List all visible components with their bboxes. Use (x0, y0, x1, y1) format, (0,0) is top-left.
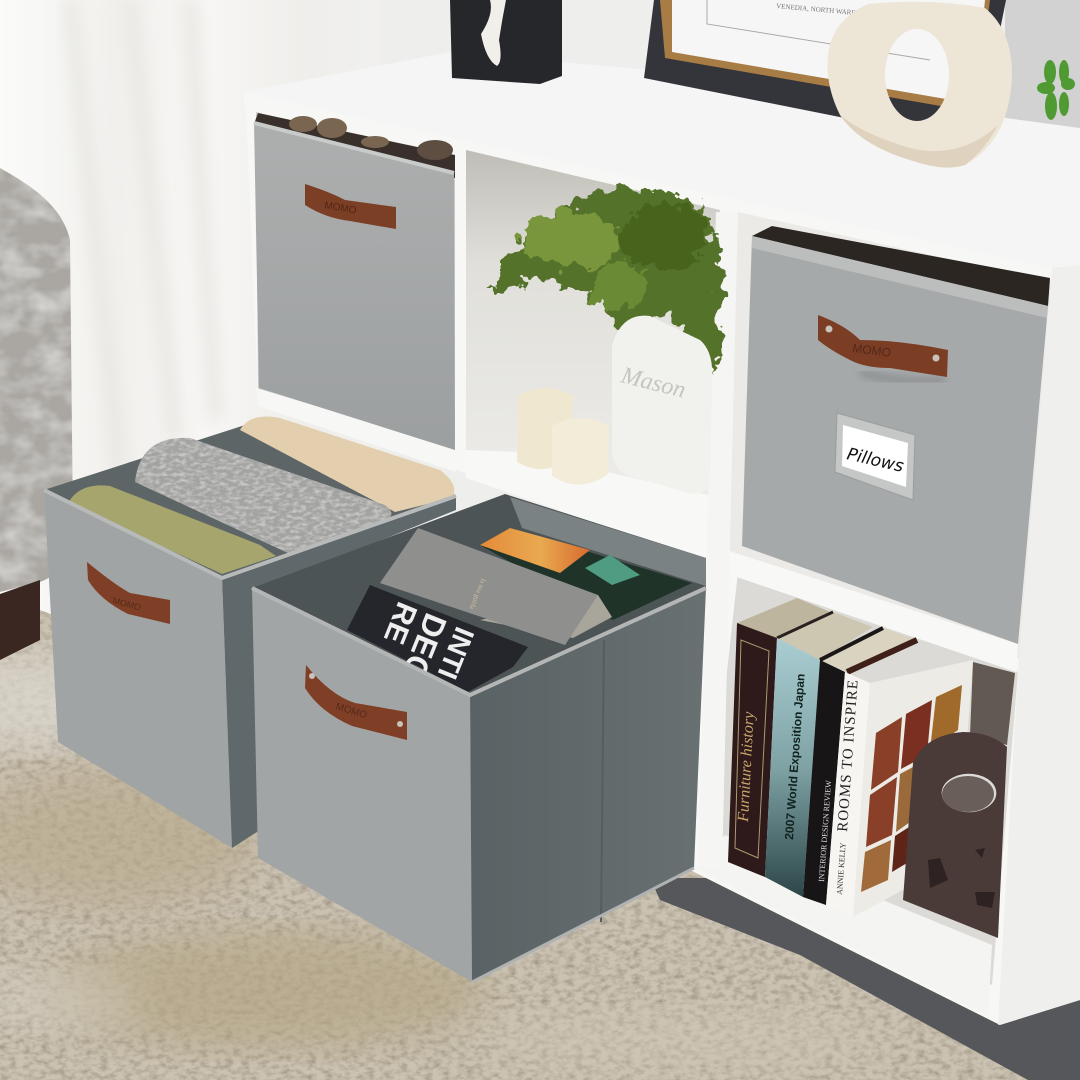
left open bin with towels: MOMO (111, 595, 142, 612)
white cube shelf unit (243, 52, 1080, 1025)
olive towel (68, 485, 276, 574)
book: world exposition: 2007 World Exposition Japan (782, 673, 808, 840)
cell: upper left interior (256, 112, 455, 460)
right bin with label (742, 236, 1048, 644)
front open bin with books: MOMO (334, 701, 368, 721)
right side panel (998, 265, 1080, 1025)
dark floor (650, 878, 1080, 1080)
book: interior design review: INTERIOR DESIGN REVIEW (817, 780, 833, 882)
picture frame: VENEDIA, NORTH WARDS MALL (776, 2, 882, 19)
book: rooms to inspire: ANNIE KELLY (835, 842, 848, 895)
leather handle (818, 315, 948, 377)
leather handle (305, 665, 407, 740)
book: furniture history (728, 598, 830, 877)
shaggy beige rug (0, 610, 1035, 1080)
dark wooden ornament (903, 732, 1007, 938)
lower right board (720, 548, 1018, 672)
dark gap above upper left bin (254, 113, 455, 178)
dark gap above right bin (752, 226, 1050, 306)
cover photo grid (861, 685, 962, 892)
decor on top of the shelf (450, 0, 1075, 168)
book: rooms to inspire (826, 660, 973, 917)
peach towel (240, 416, 454, 512)
books in lower right cell (728, 598, 1015, 938)
bin side face (470, 588, 706, 982)
book: interior design review (803, 628, 917, 905)
black tissue box (450, 0, 562, 84)
grey book: la tua guida (468, 577, 488, 611)
spine (826, 672, 870, 917)
left shelf board (256, 388, 456, 472)
book: furniture history: Furniture history (735, 711, 758, 823)
mason jar: Mason (618, 362, 688, 404)
shelf front body (243, 92, 1080, 1025)
cover (853, 660, 973, 917)
center vertical post (698, 212, 738, 870)
cream ring vase (828, 2, 1012, 168)
shelf top surface (243, 52, 1080, 285)
armchair (0, 168, 73, 660)
label holder (835, 413, 915, 500)
right bin with label: MOMO (852, 341, 892, 360)
leather handle (87, 562, 170, 624)
left open bin with towels (44, 416, 456, 848)
black book: INTI DEC RE: RE (377, 597, 423, 648)
cell: lower right interior (706, 572, 1018, 985)
cell: upper middle back (466, 150, 720, 528)
handle shadow (860, 372, 945, 381)
bin front face (44, 490, 232, 848)
leather handle (305, 184, 396, 229)
upper left bin (254, 122, 455, 450)
cell: upper right interior (722, 212, 1052, 660)
grey book (380, 528, 612, 645)
pillar candles (517, 388, 609, 485)
black book: INTI DEC RE: DEC (395, 608, 454, 685)
black book: INTI DEC RE: INTI (432, 623, 480, 683)
bin far interior (44, 425, 456, 578)
mason jar (612, 316, 712, 494)
fern plant and white mason jar (492, 189, 722, 494)
dark back corner (970, 662, 1015, 745)
wall and curtain background (0, 0, 1080, 700)
label holder: Pillows (845, 444, 906, 477)
black book: INTI DEC RE (347, 585, 528, 692)
upper left bin: MOMO (323, 200, 357, 217)
clover sprig (1037, 60, 1075, 120)
bin side face (222, 496, 456, 848)
book: world exposition (765, 612, 873, 897)
colorful book (480, 528, 692, 620)
bin front face (252, 588, 472, 982)
book: rooms to inspire: ROOMS TO INSPIRE (835, 679, 862, 832)
fern foliage (492, 189, 722, 375)
bottom board (695, 835, 992, 1016)
picture frame (644, 0, 1006, 146)
front open bin with books (252, 494, 706, 982)
bin interior (252, 494, 706, 695)
middle shelf board (466, 450, 712, 562)
grey knit towel (135, 438, 392, 554)
stones behind upper left bin (289, 116, 453, 160)
